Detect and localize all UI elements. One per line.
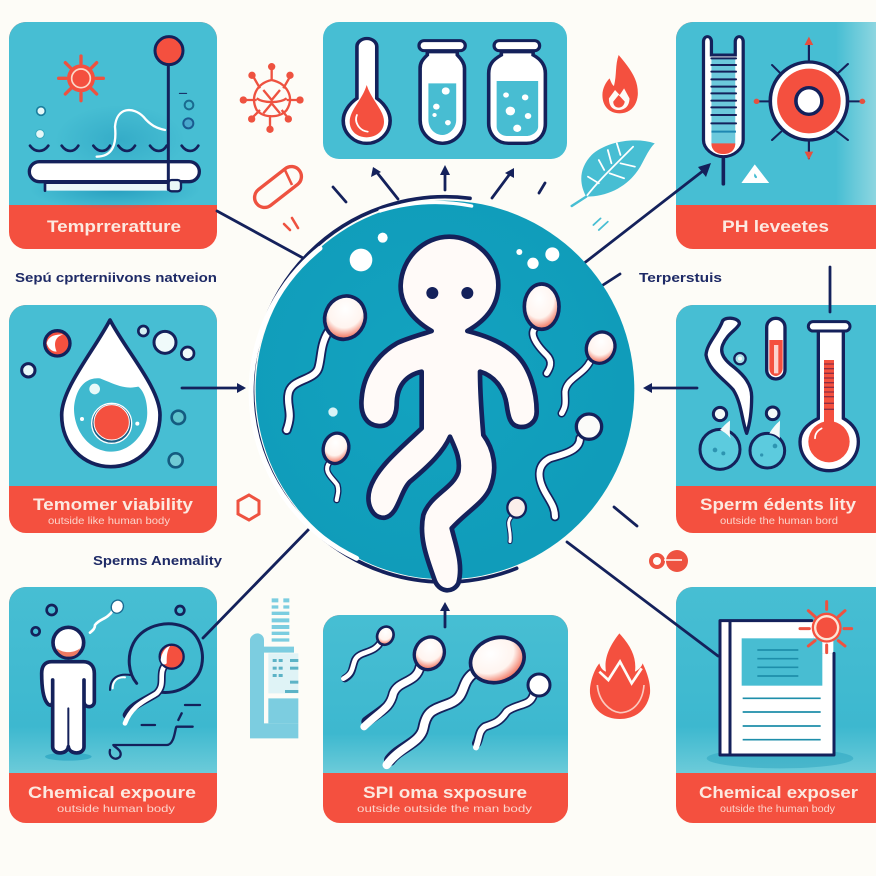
sperm cells bbox=[287, 284, 620, 542]
label: viability: Temomer viability bbox=[33, 495, 194, 514]
central circle with figure and sperm bbox=[251, 197, 634, 590]
bubbles bbox=[328, 233, 559, 417]
label: chemical exposure left: Chemical expoure bbox=[28, 783, 196, 802]
icon: red pill bbox=[251, 162, 305, 230]
icon: building chart bbox=[250, 598, 298, 738]
icon: document with sun bbox=[707, 602, 853, 768]
icon: red molecule bbox=[240, 63, 304, 133]
panel: chemical exposure left bbox=[9, 587, 217, 823]
icon: person and sperm bbox=[32, 598, 202, 761]
icon: red dumbbell molecule bbox=[651, 550, 688, 572]
icon: water drop with bubbles bbox=[22, 320, 194, 467]
icon: four sperm bbox=[343, 624, 550, 765]
sublabel: sperm exposure center: outside outside the man body bbox=[357, 803, 533, 815]
icon: bath with sun and thermometer pole bbox=[29, 37, 199, 191]
sublabel: chemical exposure left: outside human body bbox=[57, 803, 176, 815]
label: chemical exposure right: Chemical exposer bbox=[699, 783, 858, 802]
icon: big flame bbox=[590, 633, 650, 719]
sublabel: viability: outside like human body bbox=[48, 515, 171, 527]
icon: hexagon bbox=[238, 495, 259, 520]
icon: test tube and target bbox=[703, 37, 865, 184]
label: sperm exposure center: SPI oma sxposure bbox=[363, 783, 527, 802]
icon: teal leaf bbox=[572, 140, 655, 230]
figure: white person bbox=[361, 237, 537, 590]
caption: right upper: Terperstuis bbox=[639, 270, 722, 285]
panel: chemical exposure right bbox=[676, 587, 876, 823]
panel: temperature bbox=[9, 22, 217, 249]
panel: pH levels bbox=[676, 22, 876, 249]
icon: thermometer and two vials bbox=[343, 39, 545, 143]
label: temperature: Temprreratture bbox=[47, 217, 181, 236]
sublabel: sperm density: outside the human bord bbox=[720, 515, 838, 527]
icon: sperm, capsule, flasks and thermometer bbox=[700, 318, 858, 471]
icon: small flame bbox=[602, 55, 638, 113]
panel: sperm exposure center bbox=[323, 615, 568, 823]
caption: left upper: Sepú cprterniivons natveion bbox=[15, 270, 217, 285]
panel: vials and thermometer bbox=[323, 22, 567, 159]
label: sperm density: Sperm édents lity bbox=[700, 495, 857, 514]
connector lines and arrows bbox=[182, 163, 830, 656]
panel: sperm density bbox=[676, 305, 876, 533]
sublabel: chemical exposure right: outside the human body bbox=[720, 803, 836, 815]
label: pH levels: PH leveetes bbox=[722, 217, 829, 236]
panel: viability bbox=[9, 305, 217, 533]
caption: left lower: Sperms Anemality bbox=[93, 553, 223, 568]
